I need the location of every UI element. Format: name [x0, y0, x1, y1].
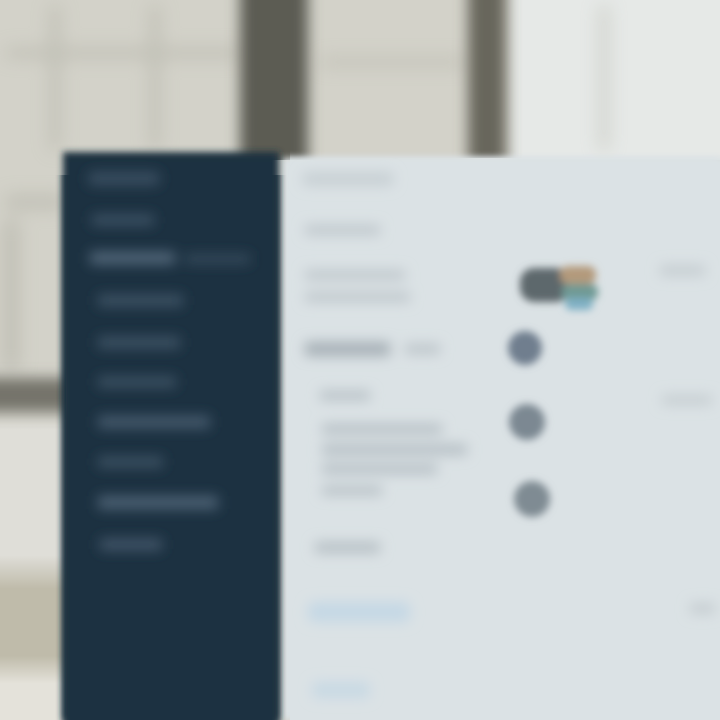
sidebar item: menu entry six	[98, 416, 210, 428]
text block: content heading	[302, 172, 394, 186]
link: blue highlighted text	[308, 602, 410, 622]
text block: paragraph	[320, 391, 467, 495]
sidebar item: menu entry one	[92, 215, 154, 225]
sidebar item: menu entry five	[98, 377, 176, 387]
sidebar item: menu entry eight	[98, 496, 218, 509]
icon: circle avatar two	[509, 404, 545, 440]
sidebar item: menu entry four	[98, 337, 180, 348]
text block: small label	[315, 542, 380, 553]
dark window bar horizontal	[0, 378, 66, 412]
dark window column left	[240, 0, 308, 160]
link: lower blue text	[312, 682, 370, 698]
panel: light content area	[282, 158, 720, 720]
panel: dark sidebar	[63, 152, 279, 720]
icon: circle avatar one	[508, 331, 542, 365]
sidebar item: title	[88, 172, 160, 185]
sidebar item: menu entry two	[90, 252, 250, 264]
sidebar item: menu entry seven	[98, 457, 163, 467]
sidebar item: menu entry nine	[100, 539, 162, 550]
dark window column right	[468, 0, 506, 158]
text block: subheading	[305, 342, 440, 356]
icon: multicolor logo	[520, 266, 598, 310]
text block: intro lines	[305, 225, 410, 302]
icon: circle avatar three	[514, 481, 550, 517]
sidebar item: menu entry three	[98, 295, 183, 306]
text block: right labels	[660, 265, 715, 614]
